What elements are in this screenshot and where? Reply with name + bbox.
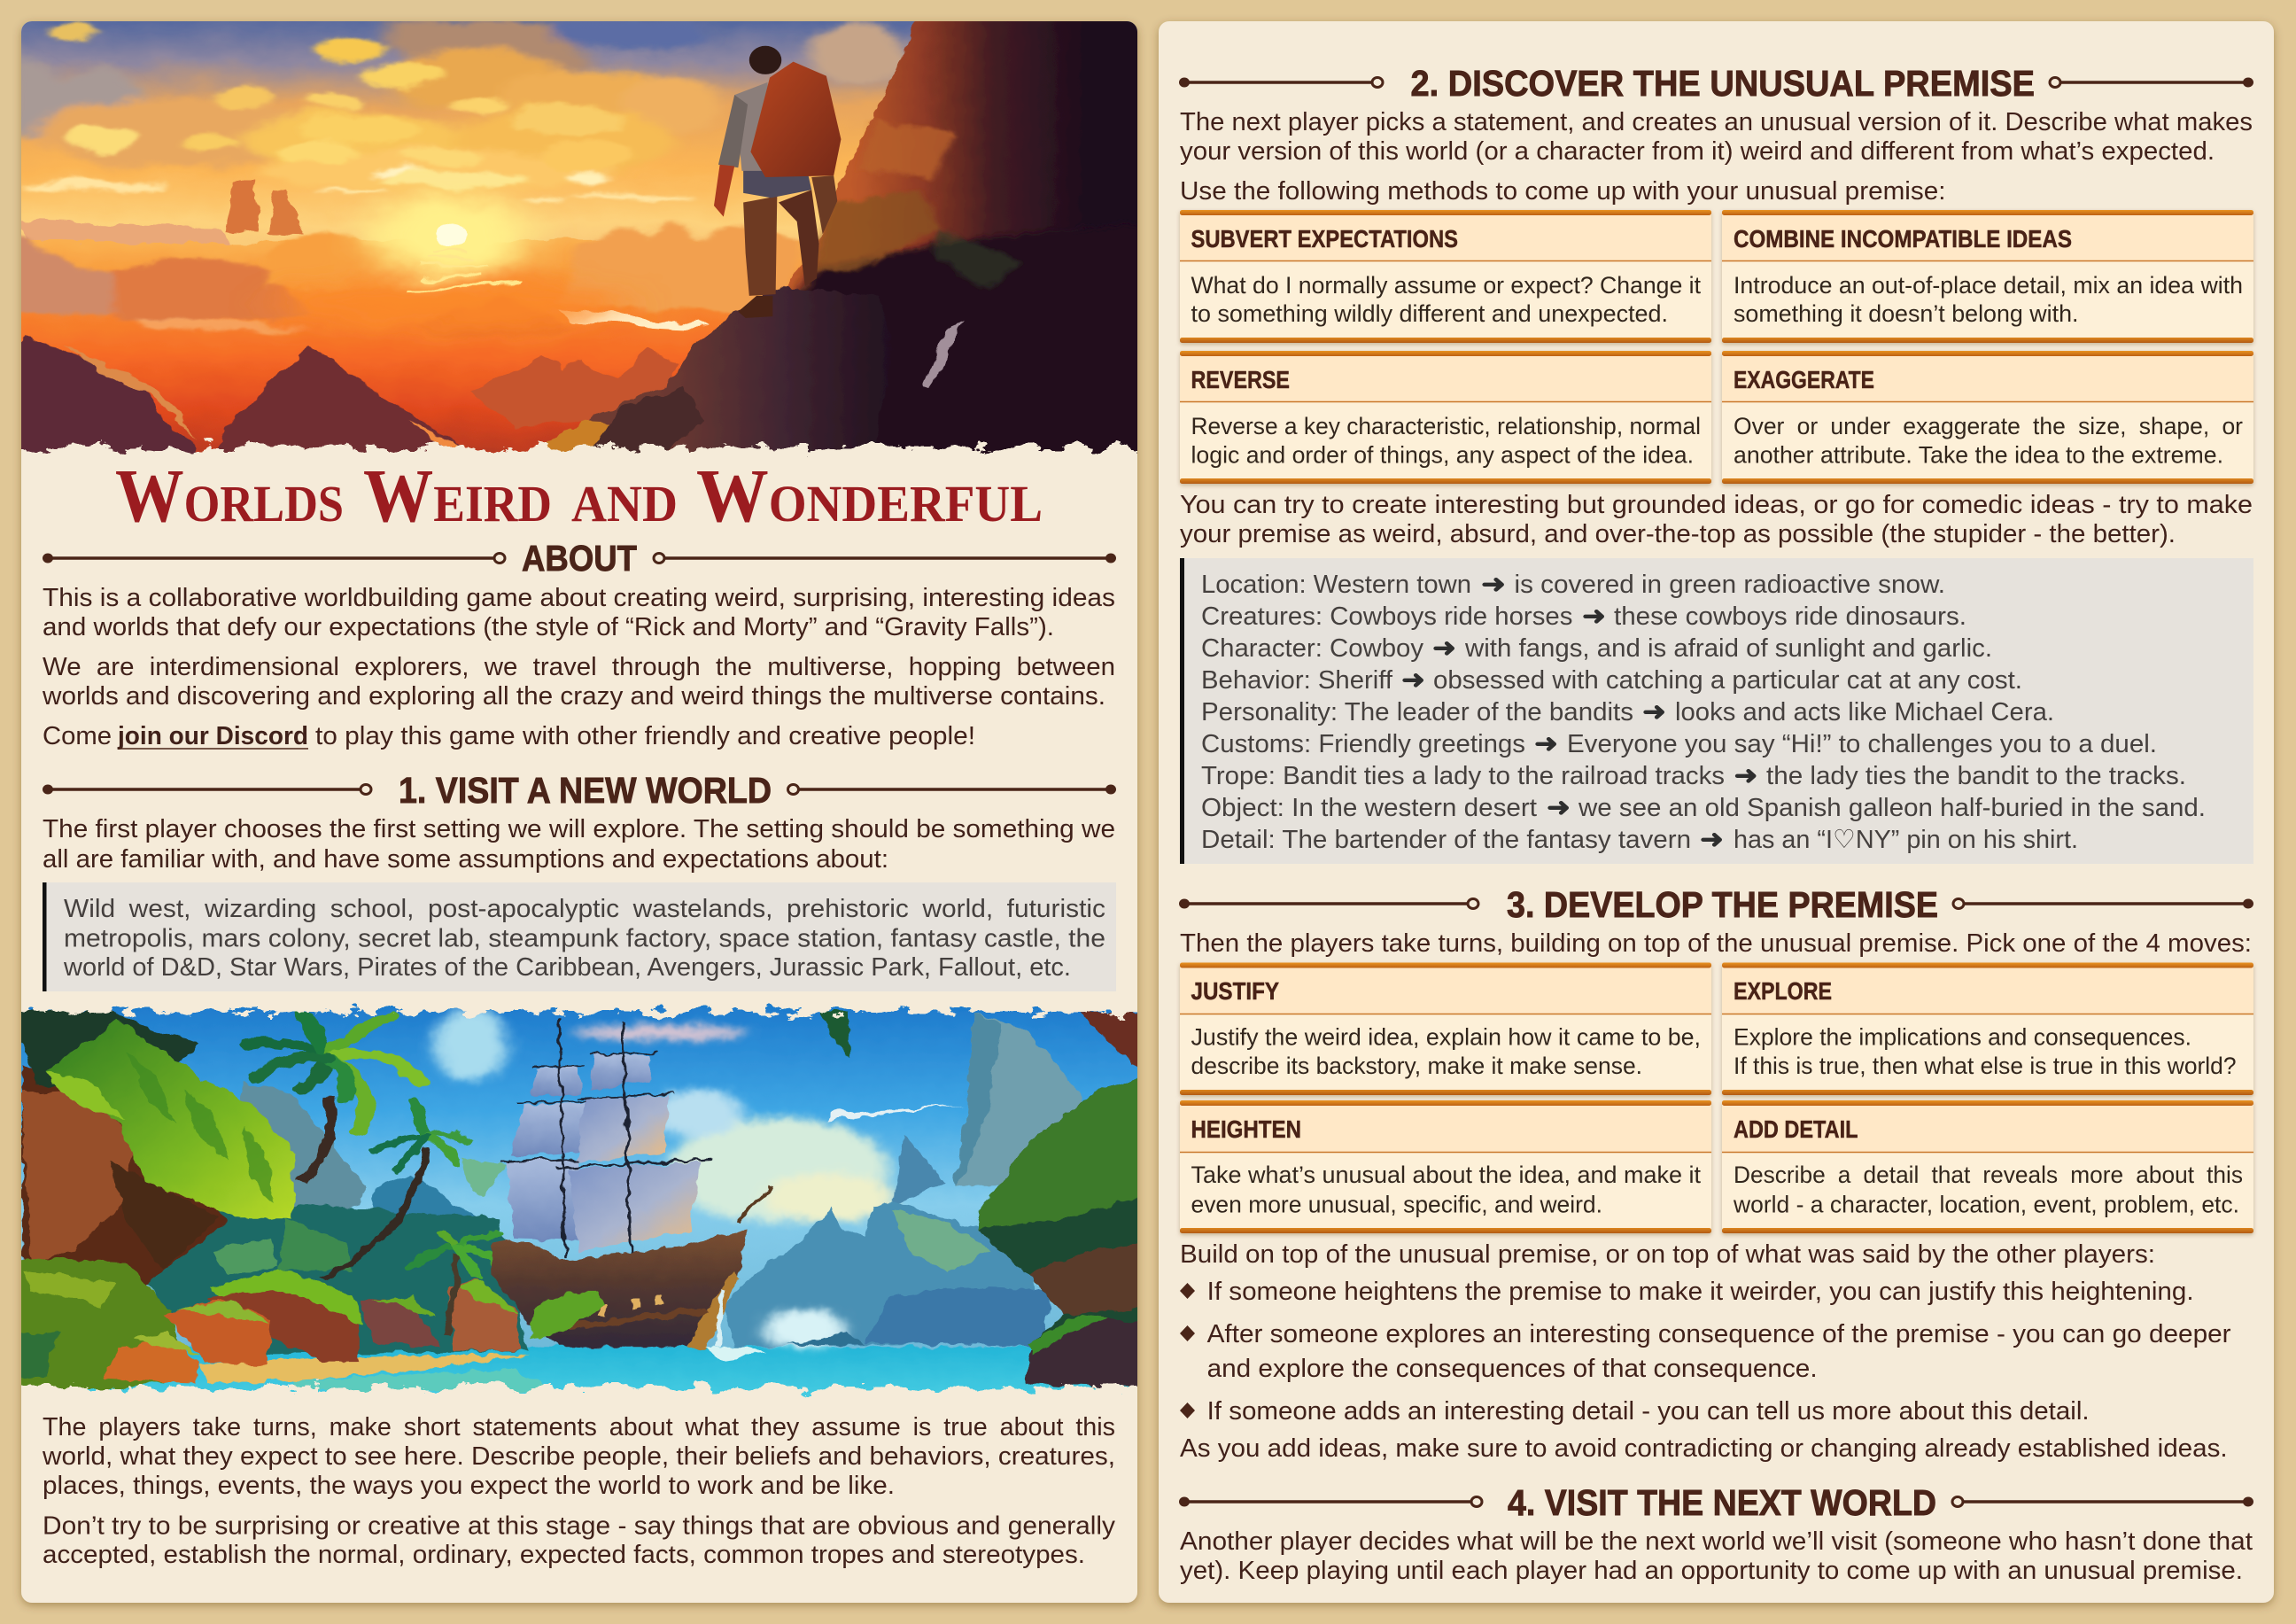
callout: unusual premise examples: Creatures: Cowboys ride horses xyxy=(1201,602,1572,631)
card: combine incompatible ideas: Introduce an out-of-place detail, mix an idea with xyxy=(1734,272,2243,299)
title: WEIRD xyxy=(363,453,552,538)
card: subvert expectations: What do I normally assume or expect? Change it xyxy=(1191,272,1701,299)
card: heighten: Take what’s unusual about the idea, and make it xyxy=(1191,1162,1701,1188)
text: about paragraphs: and worlds that defy our expectations (the style of “Rick and Morty” and “Gravity Falls”). xyxy=(43,613,1054,641)
callout: unusual premise examples: Behavior: Sheriff xyxy=(1201,666,1393,695)
callout: unusual premise examples: ➜ xyxy=(1401,664,1425,695)
card: add detail: ADD DETAIL xyxy=(1734,1115,1858,1143)
card: justify: describe its backstory, make it make sense. xyxy=(1191,1053,1642,1079)
heading: 1. visit a new world: 1. VISIT A NEW WORLD xyxy=(399,770,772,811)
palm fronds xyxy=(246,1014,500,1277)
card: reverse: Reverse a key characteristic, relationship, normal xyxy=(1191,413,1701,439)
card: explore: If this is true, then what else is true in this world? xyxy=(1734,1053,2236,1079)
heading: 4. visit the next world xyxy=(1179,1482,2253,1523)
heading: 2. discover the unusual premise: 2. DISCOVER THE UNUSUAL PREMISE xyxy=(1410,63,2035,104)
callout: setting examples: metropolis, mars colony, secret lab, steampunk factory, space station, fantasy castle, the xyxy=(64,925,1105,953)
bay water xyxy=(87,1343,1129,1398)
card: add detail: Describe a detail that reveals more about this xyxy=(1734,1162,2243,1188)
text: about paragraphs: Come xyxy=(43,722,112,750)
callout: unusual premise examples: is covered in green radioactive snow. xyxy=(1515,571,1945,599)
card: reverse: REVERSE xyxy=(1191,366,1290,393)
pirate ship xyxy=(491,1010,1175,1389)
torn paper edge below ship image xyxy=(21,1379,1137,1414)
text: unusual premise intro: Use the following methods to come up with your unusual premise: xyxy=(1180,177,1945,206)
card: subvert expectations: to something wildly different and unexpected. xyxy=(1191,300,1668,327)
card: combine incompatible ideas: COMBINE INCOMPATIBLE IDEAS xyxy=(1734,225,2072,253)
heading: 3. develop the premise: 3. DEVELOP THE PREMISE xyxy=(1507,884,1938,925)
text: unusual premise intro: The next player picks a statement, and creates an unusual version of it. Describe what makes xyxy=(1180,108,2253,136)
card: explore xyxy=(1722,962,2253,1095)
callout: unusual premise examples: ➜ xyxy=(1642,696,1666,727)
text: first player intro xyxy=(43,815,1115,874)
callout: unusual premise examples: Character: Cowboy xyxy=(1201,634,1424,663)
card: explore: EXPLORE xyxy=(1734,977,1832,1005)
list: building tips: and explore the consequences of that consequence. xyxy=(1207,1355,1818,1383)
card: exaggerate: Over or under exaggerate the size, shape, or xyxy=(1734,413,2243,439)
callout: unusual premise examples: ➜ xyxy=(1534,728,1558,758)
illustration: hiker watching sunset from cliff xyxy=(21,21,1137,457)
torn paper edge under top image xyxy=(21,438,1137,480)
card: add detail: world - a character, location, event, problem, etc. xyxy=(1733,1191,2239,1217)
callout: unusual premise examples: the lady ties the bandit to the tracks. xyxy=(1766,762,2186,790)
heading: 3. develop the premise xyxy=(1179,884,2253,925)
torn paper edge above ship image xyxy=(21,983,1137,1021)
card: justify xyxy=(1180,962,1711,1095)
card: heighten: HEIGHTEN xyxy=(1191,1115,1301,1143)
card: exaggerate: another attribute. Take the idea to the extreme. xyxy=(1734,441,2223,468)
callout: unusual premise examples: Everyone you say “Hi!” to challenges you to a duel. xyxy=(1567,730,2157,758)
text: taking turns: The players take turns, make short statements about what they assume is true about this xyxy=(43,1413,1115,1441)
title: WORLDS xyxy=(115,453,344,538)
text: about paragraphs: This is a collaborative worldbuilding game about creating weird, surprising, interesting ideas xyxy=(43,584,1115,612)
callout: unusual premise examples: ➜ xyxy=(1481,569,1506,599)
text: build on top: Build on top of the unusual premise, or on top of what was said by the other players: xyxy=(1180,1240,2155,1269)
text: first player intro: The first player chooses the first setting we will explore. The setting should be something we xyxy=(43,815,1115,843)
callout: setting examples: Wild west, wizarding school, post-apocalyptic wastelands, prehistoric world, futuristic xyxy=(64,895,1105,923)
card: exaggerate: EXAGGERATE xyxy=(1734,366,1874,393)
text: unusual premise intro: your version of this world (or a character from it) weird and different from what’s expected. xyxy=(1180,137,2215,166)
card: reverse xyxy=(1180,351,1711,484)
list: building tips xyxy=(1180,1278,2231,1426)
text: about paragraphs: worlds and discovering and exploring all the crazy and weird things the multiverse contains. xyxy=(42,682,1105,711)
callout: unusual premise examples xyxy=(1180,558,2253,864)
callout: unusual premise examples: Detail: The bartender of the fantasy tavern xyxy=(1201,826,1691,854)
text: taking turns: Don’t try to be surprising or creative at this stage - say things that are obvious and generally xyxy=(43,1511,1116,1540)
card: subvert expectations: SUBVERT EXPECTATIONS xyxy=(1191,225,1458,253)
callout: unusual premise examples: Personality: The leader of the bandits xyxy=(1201,698,1633,727)
callout: unusual premise examples: Object: In the western desert xyxy=(1201,794,1537,822)
callout: unusual premise examples: we see an old Spanish galleon half-buried in the sand. xyxy=(1578,794,2206,822)
callout: unusual premise examples: looks and acts like Michael Cera. xyxy=(1675,698,2054,727)
illustration: pirate ship in tropical bay xyxy=(21,1003,1137,1398)
text: unusual premise intro xyxy=(1180,108,2253,206)
text: about paragraphs xyxy=(42,584,1115,750)
cliff wall xyxy=(673,21,1137,377)
callout: unusual premise examples: has an “I♡NY” pin on his shirt. xyxy=(1734,824,2078,854)
callout: unusual premise examples: with fangs, and is afraid of sunlight and garlic. xyxy=(1464,634,1992,663)
list: building tips: If someone adds an interesting detail - you can tell us more about this detail. xyxy=(1207,1397,2090,1426)
text: grounded or comedic: You can try to create interesting but grounded ideas, or go for comedic ideas - try to make xyxy=(1180,491,2253,519)
callout: setting examples: world of D&D, Star Wars, Pirates of the Caribbean, Avengers, Jurassic Park, Fallout, etc. xyxy=(63,953,1071,982)
heading: about xyxy=(43,538,1116,579)
card: reverse: logic and order of things, any aspect of the idea. xyxy=(1191,441,1694,468)
text: develop intro: Then the players take turns, building on top of the unusual premise. Pick one of the 4 moves: xyxy=(1180,929,2252,958)
title xyxy=(115,453,1043,538)
callout: unusual premise examples: ➜ xyxy=(1700,824,1724,854)
card: heighten xyxy=(1180,1100,1711,1233)
text: about paragraphs: to play this game with other friendly and creative people! xyxy=(315,722,975,750)
card: justify: JUSTIFY xyxy=(1191,977,1279,1005)
title: AND xyxy=(571,475,678,532)
card: subvert expectations xyxy=(1180,210,1711,343)
card: explore: Explore the implications and consequences. xyxy=(1734,1024,2191,1051)
callout: unusual premise examples: Location: Western town xyxy=(1201,571,1471,599)
callout: unusual premise examples: these cowboys ride dinosaurs. xyxy=(1614,602,1966,631)
card: exaggerate xyxy=(1722,351,2253,484)
callout: unusual premise examples: ➜ xyxy=(1734,760,1757,790)
callout: unusual premise examples: ➜ xyxy=(1432,633,1456,663)
text: about paragraphs: join our Discord xyxy=(117,722,308,750)
hiker figure xyxy=(714,46,841,318)
text: first player intro: all are familiar with, and have some assumptions and expectations about: xyxy=(43,845,888,874)
text: next world: Another player decides what will be the next world we’ll visit (someone who hasn’t done that xyxy=(1180,1527,2253,1556)
callout: unusual premise examples: ➜ xyxy=(1547,792,1571,822)
card: combine incompatible ideas: something it doesn’t belong with. xyxy=(1734,300,2078,327)
list: building tips: After someone explores an interesting consequence of the premise - you can go deeper xyxy=(1207,1320,2231,1348)
card: add detail xyxy=(1722,1100,2253,1233)
text: grounded or comedic: your premise as weird, absurd, and over-the-top as possible (the stupider - the better). xyxy=(1180,520,2176,548)
title: WONDERFUL xyxy=(696,453,1043,538)
text: about paragraphs: We are interdimensional explorers, we travel through the multiverse, hopping between xyxy=(43,653,1115,681)
heading: about: ABOUT xyxy=(522,538,637,579)
callout: unusual premise examples: obsessed with catching a particular cat at any cost. xyxy=(1433,666,2022,695)
heading: 4. visit the next world: 4. VISIT THE NEXT WORLD xyxy=(1508,1482,1936,1523)
panel: left page xyxy=(0,12,1222,1603)
text: taking turns: places, things, events, the ways you expect the world to work and be like. xyxy=(43,1472,895,1500)
heading: 2. discover the unusual premise xyxy=(1179,63,2253,104)
text: next world: yet). Keep playing until each player had an opportunity to come up with an unusual premise. xyxy=(1180,1557,2243,1585)
callout: setting examples xyxy=(43,882,1116,991)
callout: unusual premise examples: Trope: Bandit ties a lady to the railroad tracks xyxy=(1201,762,1725,790)
heading: 1. visit a new world xyxy=(43,770,1116,811)
card: combine incompatible ideas xyxy=(1722,210,2253,343)
list: building tips: If someone heightens the premise to make it weirder, you can justify this heightening. xyxy=(1207,1278,2194,1306)
text: grounded or comedic xyxy=(1180,491,2253,548)
text: taking turns: accepted, establish the normal, ordinary, expected facts, common tropes and stereotypes. xyxy=(43,1541,1085,1569)
callout: unusual premise examples: ➜ xyxy=(1582,601,1606,631)
card: justify: Justify the weird idea, explain how it came to be, xyxy=(1191,1024,1701,1051)
text: taking turns: world, what they expect to see here. Describe people, their beliefs and behaviors, creatures, xyxy=(42,1442,1115,1471)
panel: right page xyxy=(1159,21,2274,1603)
text: avoid contradiction: As you add ideas, make sure to avoid contradicting or changing already established ideas. xyxy=(1180,1434,2228,1463)
text: taking turns xyxy=(42,1413,1116,1569)
callout: unusual premise examples: Customs: Friendly greetings xyxy=(1201,730,1525,758)
card: heighten: even more unusual, specific, and weird. xyxy=(1191,1191,1602,1217)
text: next world xyxy=(1180,1527,2253,1585)
